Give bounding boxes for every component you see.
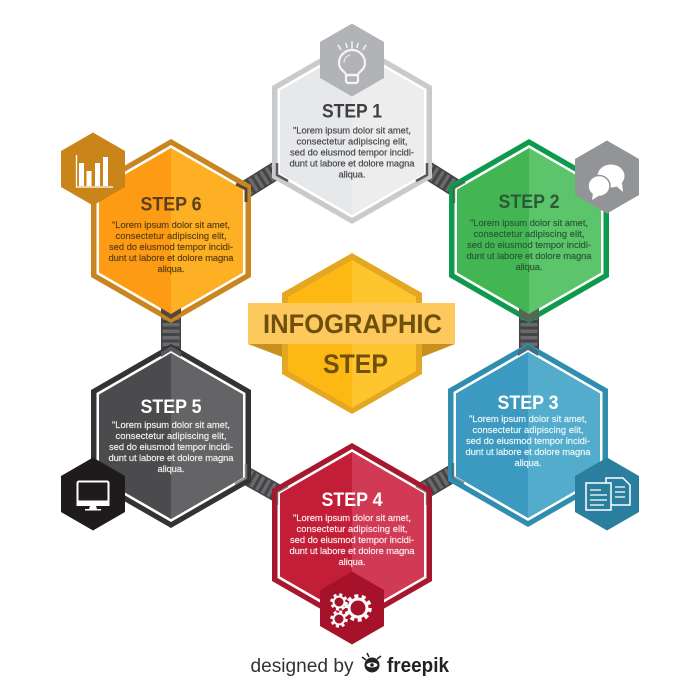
text block: step 3: aliqua. — [514, 457, 542, 468]
central title badge — [248, 253, 455, 414]
text block: step 4: aliqua. — [338, 556, 366, 567]
icon: speech bubbles — [575, 140, 639, 214]
icon: freepik logo — [362, 653, 381, 672]
icon: monitor — [61, 458, 125, 530]
panel: step 2 — [449, 139, 609, 323]
text block: step 1: consectetur adipiscing elit, — [296, 136, 408, 146]
text block: step 6 — [108, 219, 234, 274]
text block: step 6: aliqua. — [158, 263, 184, 274]
text block: step 3: consectetur adipiscing elit, — [472, 424, 584, 435]
heading: step 3: STEP 3 — [498, 392, 559, 414]
text block: step 3: dunt ut labore et dolore magna — [466, 446, 591, 457]
icon: gears — [320, 572, 384, 644]
text block: step 5: aliqua. — [158, 463, 184, 474]
text block: step 4: consectetur adipiscing elit, — [296, 523, 408, 534]
text block: step 5: dunt ut labore et dolore magna — [108, 452, 234, 463]
text block: step 3: sed do eiusmod tempor incidi- — [466, 435, 590, 446]
text block: step 5: "Lorem ipsum dolor sit amet, — [112, 419, 230, 430]
panel: step 1 — [272, 40, 432, 224]
icon: bar chart — [61, 132, 125, 206]
text block: step 6: consectetur adipiscing elit, — [116, 230, 226, 241]
text: designed by: designed by — [250, 656, 354, 677]
footer credit — [250, 653, 450, 677]
text block: step 5: sed do eiusmod tempor incidi- — [109, 441, 233, 452]
text block: step 4 — [290, 512, 415, 567]
text block: step 1: aliqua. — [338, 168, 366, 180]
text block: step 2: consectetur adipiscing elit, — [474, 228, 584, 239]
icon: light bulb — [320, 24, 384, 96]
heading: step: STEP — [323, 349, 388, 379]
text block: step 2: sed do eiusmod tempor incidi- — [467, 239, 591, 250]
icon: documents — [575, 458, 639, 530]
text block: step 4: "Lorem ipsum dolor sit amet, — [293, 512, 411, 523]
text block: step 5 — [108, 419, 234, 474]
text block: step 3 — [466, 413, 591, 468]
text block: step 5: consectetur adipiscing elit, — [116, 430, 226, 441]
text block: step 1: dunt ut labore et dolore magna — [290, 158, 415, 168]
panel: step 6 — [91, 139, 251, 323]
heading: infographic: INFOGRAPHIC — [263, 309, 442, 339]
heading: step 2: STEP 2 — [498, 191, 560, 213]
heading: step 4: STEP 4 — [322, 489, 383, 511]
text block: step 6: sed do eiusmod tempor incidi- — [109, 241, 233, 252]
text block: step 4: dunt ut labore et dolore magna — [290, 545, 415, 556]
text block: step 2: aliqua. — [516, 261, 542, 272]
panel: step 5 — [91, 344, 251, 528]
heading: step 5: STEP 5 — [140, 396, 202, 418]
heading: step 1: STEP 1 — [322, 100, 382, 122]
panel: step 3 — [448, 343, 608, 527]
text block: step 6: "Lorem ipsum dolor sit amet, — [112, 219, 230, 230]
text block: step 1: "Lorem ipsum dolor sit amet, — [293, 124, 411, 136]
text block: step 4: sed do eiusmod tempor incidi- — [290, 534, 414, 545]
text block: step 1: sed do eiusmod tempor incidi- — [290, 146, 414, 158]
panel: step 4 — [272, 443, 432, 627]
text block: step 2: "Lorem ipsum dolor sit amet, — [470, 217, 588, 228]
text: freepik: freepik — [387, 655, 450, 677]
heading: step 6: STEP 6 — [140, 194, 202, 216]
text block: step 2 — [466, 217, 592, 272]
text block: step 1 — [290, 124, 415, 180]
connectors between steps — [171, 170, 529, 493]
text block: step 6: dunt ut labore et dolore magna — [108, 252, 234, 263]
text block: step 2: dunt ut labore et dolore magna — [466, 250, 592, 261]
text block: step 3: "Lorem ipsum dolor sit amet, — [469, 413, 587, 424]
